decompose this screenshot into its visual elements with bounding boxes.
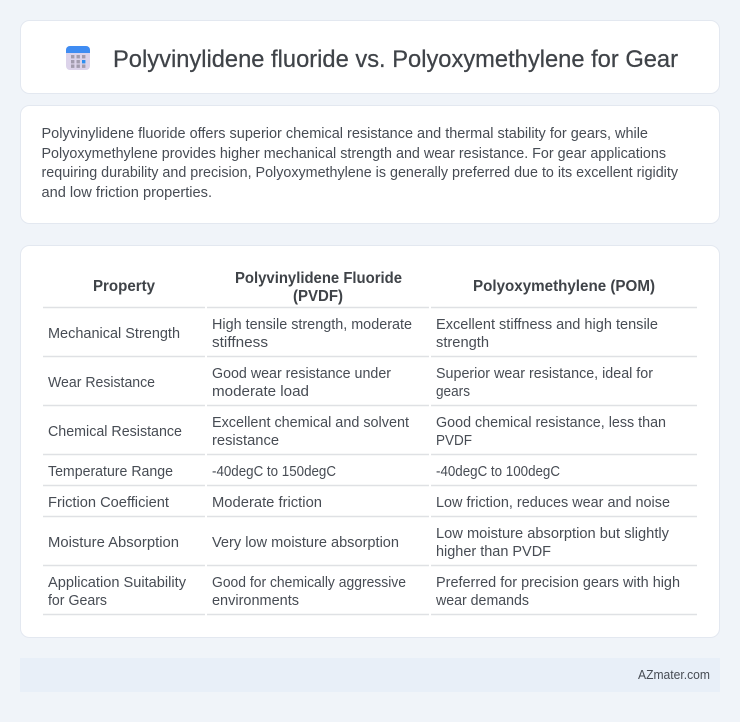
- row: wear resistance: moderate load: [212, 384, 309, 400]
- panel: summary: [20, 106, 720, 224]
- row: chemical resistance: PVDF: [436, 433, 472, 449]
- row: temperature range: -40degC to 150degC: [212, 464, 336, 480]
- row: mechanical strength: Excellent stiffness and high tensile: [436, 317, 658, 333]
- row: friction coefficient: Friction Coefficient: [48, 495, 169, 511]
- table header: Property: [93, 278, 155, 295]
- row: wear resistance: Superior wear resistance, ideal for: [436, 366, 653, 382]
- summary text: Polyoxymethylene provides higher mechanical strength and wear resistance. For gear applications: [42, 146, 666, 162]
- row: friction coefficient: Low friction, reduces wear and noise: [436, 495, 670, 511]
- row: application suitability: Good for chemically aggressive: [212, 575, 406, 591]
- row: chemical resistance: Good chemical resistance, less than: [436, 415, 666, 431]
- summary text: and low friction properties.: [42, 185, 212, 201]
- icon: calendar: [66, 46, 90, 70]
- row: mechanical strength: Mechanical Strength: [48, 326, 180, 342]
- footer: [20, 658, 720, 692]
- row: chemical resistance: Chemical Resistance: [48, 424, 182, 440]
- row: mechanical strength: [48, 317, 658, 351]
- row: moisture absorption: Low moisture absorption but slightly: [436, 526, 670, 542]
- panel: comparison table: [20, 246, 720, 638]
- row: wear resistance: [48, 366, 653, 400]
- table header: Polyoxymethylene (POM): [473, 278, 655, 295]
- panel: header: [20, 20, 720, 94]
- row: application suitability: Preferred for precision gears with high: [436, 575, 680, 591]
- summary text: requiring durability and precision, Polyoxymethylene is generally preferred due to its excellent rigidity: [42, 165, 679, 181]
- table header: [93, 270, 655, 305]
- row: moisture absorption: [48, 526, 670, 560]
- row: friction coefficient: [48, 495, 670, 511]
- row: temperature range: Temperature Range: [48, 464, 173, 480]
- row: application suitability: [48, 575, 680, 609]
- row: friction coefficient: Moderate friction: [212, 495, 322, 511]
- row: chemical resistance: [48, 415, 666, 449]
- summary text: [42, 126, 679, 201]
- row: mechanical strength: stiffness: [212, 335, 268, 351]
- table header: Polyvinylidene Fluoride: [235, 270, 402, 287]
- table rules: [43, 308, 697, 614]
- row: temperature range: [48, 464, 560, 480]
- title: Polyvinylidene fluoride vs. Polyoxymethylene for Gear: [113, 46, 678, 73]
- row: temperature range: -40degC to 100degC: [436, 464, 560, 480]
- row: wear resistance: Good wear resistance under: [212, 366, 391, 382]
- footer credit: AZmater.com: [638, 668, 710, 682]
- row: moisture absorption: higher than PVDF: [436, 544, 551, 560]
- summary text: Polyvinylidene fluoride offers superior chemical resistance and thermal stability for gears, while: [42, 126, 648, 142]
- row: application suitability: wear demands: [435, 593, 529, 609]
- row: chemical resistance: Excellent chemical and solvent: [212, 415, 409, 431]
- row: moisture absorption: Very low moisture absorption: [212, 535, 399, 551]
- row: application suitability: environments: [212, 593, 299, 609]
- row: wear resistance: gears: [436, 384, 470, 400]
- table header: (PVDF): [293, 288, 343, 305]
- row: mechanical strength: High tensile strength, moderate: [212, 317, 412, 333]
- row: application suitability: for Gears: [48, 593, 107, 609]
- row: chemical resistance: resistance: [212, 433, 279, 449]
- row: mechanical strength: strength: [436, 335, 489, 351]
- row: wear resistance: Wear Resistance: [48, 375, 155, 391]
- row: application suitability: Application Suitability: [48, 575, 187, 591]
- row: moisture absorption: Moisture Absorption: [48, 535, 179, 551]
